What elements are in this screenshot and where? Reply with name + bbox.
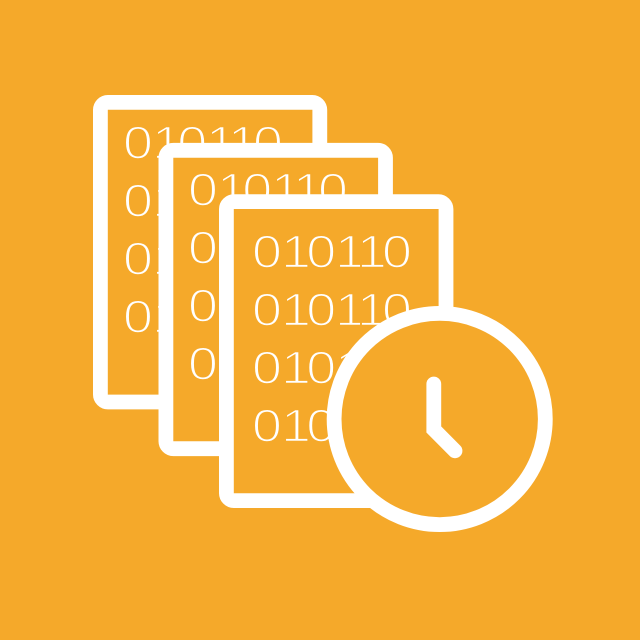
back document binary text: 010110: [123, 117, 283, 169]
back document: [100, 102, 320, 402]
front document binary text: 010110: [252, 226, 412, 278]
middle document binary text: 010110: [188, 222, 348, 274]
middle document: [166, 150, 386, 449]
middle document binary text: 010110: [188, 164, 348, 216]
back document binary text: 010110: [123, 175, 283, 227]
back document binary text: [123, 117, 283, 343]
middle document binary text: 010110: [188, 280, 348, 332]
front document frame: [226, 202, 446, 501]
middle document binary text: [188, 164, 348, 390]
icon: clock: [334, 313, 545, 525]
front document binary text: 010110: [252, 342, 412, 394]
middle document frame: [166, 150, 386, 449]
clock hands: [434, 384, 455, 451]
front document binary text: 010110: [252, 400, 412, 452]
middle document binary text: 010110: [188, 338, 348, 390]
clock face: [334, 313, 545, 525]
front document binary text: [252, 226, 412, 452]
back document frame: [100, 102, 320, 402]
front document: [226, 202, 446, 501]
back document binary text: 010110: [123, 233, 283, 285]
front document binary text: 010110: [252, 284, 412, 336]
back document binary text: 010110: [123, 291, 283, 343]
